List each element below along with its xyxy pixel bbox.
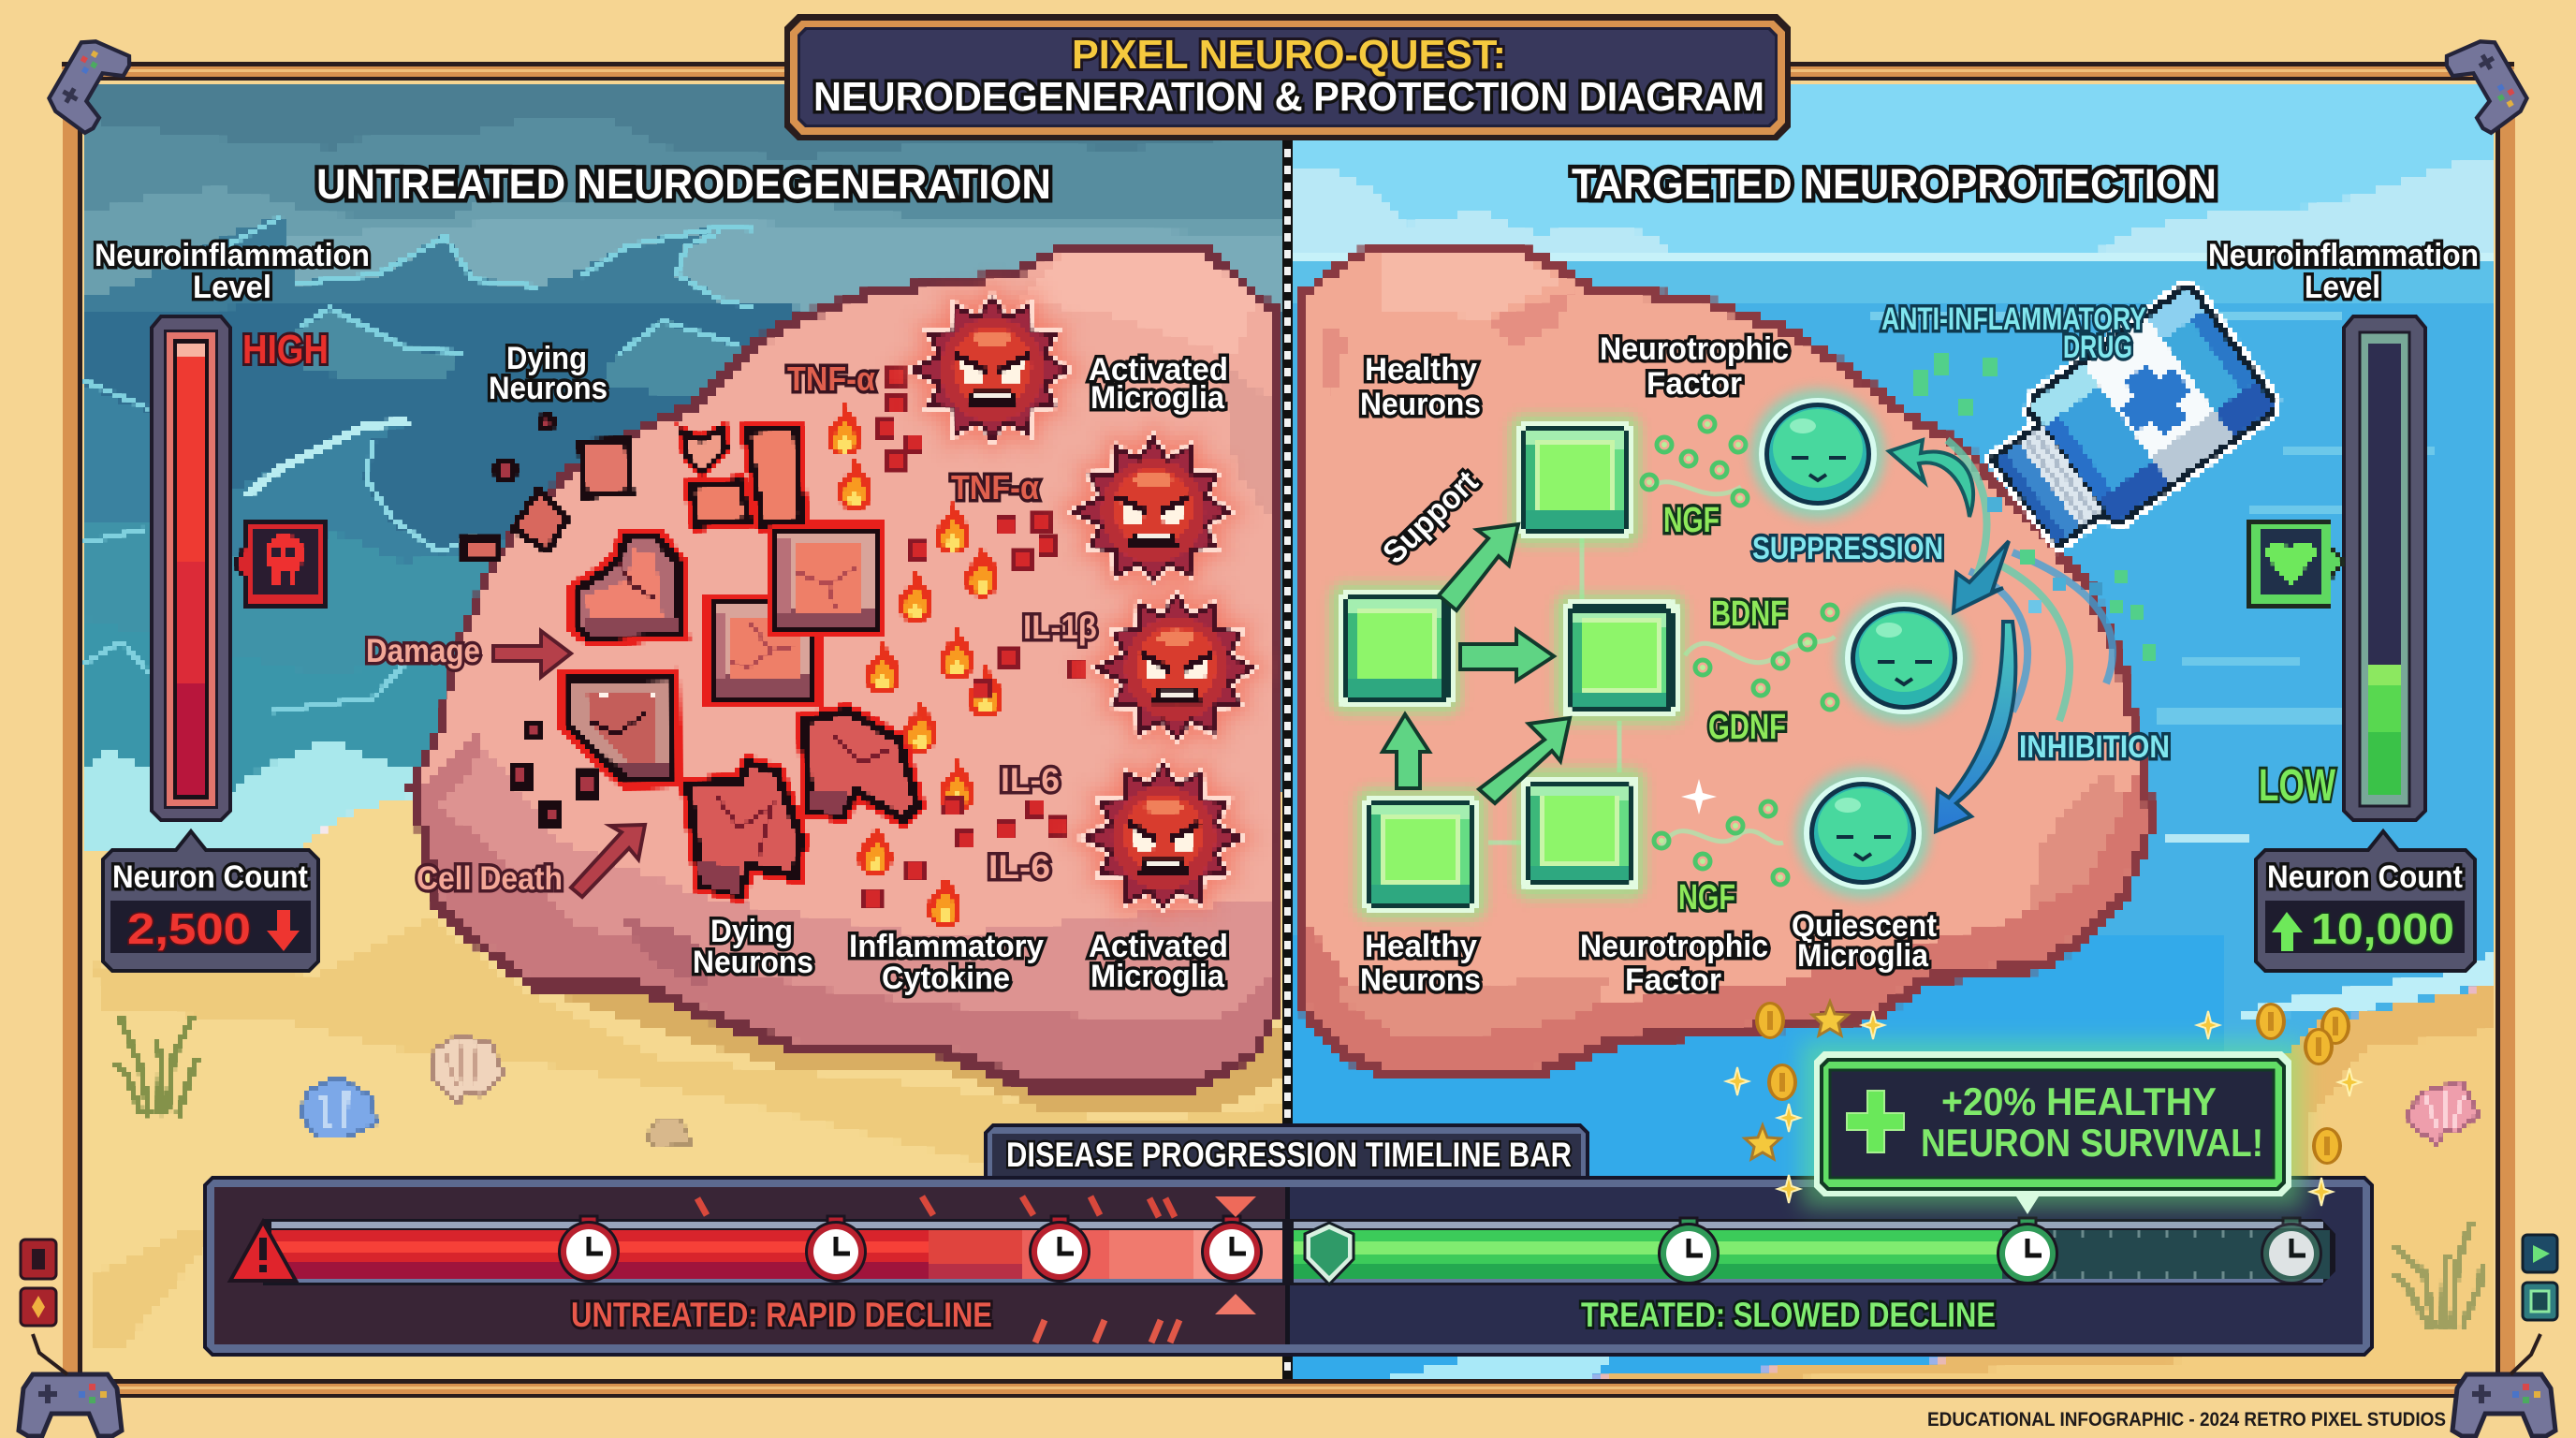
flames bbox=[827, 404, 1003, 927]
labels: protected brain: NGF bbox=[1678, 878, 1735, 917]
heading: targeted: TARGETED NEUROPROTECTION bbox=[1572, 160, 2217, 208]
footer credit: EDUCATIONAL INFOGRAPHIC - 2024 RETRO PIXEL STUDIOS bbox=[1927, 1409, 2446, 1431]
labels: untreated brain: Inflammatory bbox=[849, 929, 1044, 964]
labels: untreated brain: IL-6 bbox=[1001, 762, 1060, 799]
labels: protected brain: Microglia bbox=[1797, 938, 1929, 974]
cross on label bbox=[2124, 363, 2188, 436]
neuroinflammation label: Level bbox=[193, 270, 271, 305]
warning triangle bbox=[230, 1222, 296, 1281]
untreated label: UNTREATED: RAPID DECLINE bbox=[571, 1296, 992, 1334]
high label: HIGH bbox=[242, 327, 329, 373]
swirl of drug effect bbox=[1947, 440, 2113, 721]
divider: dashed centre line bbox=[1282, 140, 1293, 1379]
labels: protected brain bbox=[1360, 301, 2170, 998]
activated microglia 2 bbox=[1074, 439, 1229, 580]
controller: bottom right bbox=[2452, 1374, 2555, 1436]
shell: cream bbox=[432, 1035, 504, 1103]
labels: protected brain: Neurons bbox=[1360, 387, 1481, 422]
arrow: cell death bbox=[571, 825, 645, 897]
arrow: damage bbox=[493, 631, 571, 677]
drug bottle bbox=[1976, 283, 2280, 563]
brain: left hemisphere bbox=[408, 242, 1281, 1093]
labels: protected brain: Support bbox=[1376, 464, 1485, 571]
neuron 2 bbox=[704, 596, 822, 707]
controller: top left bbox=[43, 32, 133, 135]
neuroinflammation label: Level bbox=[2305, 270, 2380, 305]
labels: untreated brain: Dying bbox=[710, 914, 793, 949]
heading: untreated: UNTREATED NEURODEGENERATION bbox=[316, 160, 1051, 208]
background: stormy sea and beach bbox=[82, 81, 1288, 1379]
neuroinflammation label bbox=[95, 238, 370, 305]
quiescent microglia 3 bbox=[1795, 768, 1930, 899]
labels: protected brain: Neurotrophic bbox=[1600, 331, 1789, 367]
neuron count: protected bbox=[2256, 831, 2475, 971]
labels: protected brain: BDNF bbox=[1711, 594, 1787, 634]
arrow: inhibition bbox=[1936, 622, 2015, 831]
labels: untreated brain: Cytokine bbox=[882, 961, 1010, 996]
labels: protected brain: GDNF bbox=[1708, 708, 1786, 747]
neuron count: protected: 10,000 bbox=[2311, 904, 2454, 953]
labels: protected brain: Quiescent bbox=[1792, 908, 1937, 944]
shell: blue bbox=[300, 1077, 376, 1137]
quiescent microglia 2 bbox=[1837, 593, 1971, 724]
labels: protected brain: INHIBITION bbox=[2019, 729, 2170, 765]
title line 2: NEURODEGENERATION & PROTECTION DIAGRAM bbox=[813, 74, 1764, 120]
neuroinflammation label bbox=[2208, 238, 2479, 305]
shell: pink bbox=[2406, 1081, 2479, 1144]
brain: right hemisphere bbox=[1296, 242, 2155, 1081]
labels: untreated brain: Microglia bbox=[1090, 380, 1225, 416]
arrows between healthy neurons bbox=[1383, 524, 1570, 803]
labels: untreated brain: Microglia bbox=[1090, 959, 1225, 994]
clocks: untreated bbox=[558, 1216, 1263, 1283]
neuron count: untreated: 2,500 bbox=[127, 904, 251, 953]
neurotrophic signal lines bbox=[1488, 482, 1835, 847]
labels: protected brain: SUPPRESSION bbox=[1752, 531, 1943, 566]
controller: bottom left bbox=[19, 1374, 122, 1436]
small icons: right side buttons bbox=[2523, 1235, 2557, 1320]
neurotrophic particles bbox=[1642, 417, 1837, 885]
labels: protected brain: DRUG bbox=[2063, 330, 2132, 365]
labels: untreated brain: IL-6 bbox=[988, 849, 1050, 886]
red tick marks bbox=[697, 1196, 1179, 1343]
inflammation gauge: high bbox=[152, 316, 230, 820]
timeline tab bbox=[986, 1125, 1588, 1181]
labels: untreated brain: Activated bbox=[1089, 929, 1228, 964]
labels: protected brain: Factor bbox=[1647, 366, 1742, 402]
inflammation gauge: low bbox=[2344, 316, 2425, 820]
activated microglia 1 bbox=[913, 298, 1068, 439]
title line 1: PIXEL NEURO-QUEST: bbox=[1072, 32, 1506, 78]
labels: protected brain: Factor bbox=[1625, 962, 1721, 998]
neuron 1 bbox=[578, 536, 681, 637]
labels: untreated brain: Activated bbox=[1089, 352, 1228, 388]
timeline tab: DISEASE PROGRESSION TIMELINE BAR bbox=[1006, 1136, 1572, 1174]
red hourglass marks bbox=[1215, 1196, 1256, 1314]
labels: untreated brain: Dying bbox=[506, 341, 587, 376]
labels: protected brain: ANTI-INFLAMMATORY bbox=[1881, 301, 2146, 337]
labels: protected brain: Healthy bbox=[1365, 352, 1477, 388]
activated microglia 4 bbox=[1084, 766, 1239, 907]
neuron 4 bbox=[568, 677, 672, 780]
arrow: suppression bbox=[1889, 440, 1973, 517]
neuron 5 bbox=[688, 763, 800, 894]
neuroinflammation label: Neuroinflammation bbox=[2208, 238, 2479, 273]
bottle cap bbox=[1997, 443, 2080, 543]
arrow: drug to microglia bbox=[1954, 541, 2009, 612]
clocks: treated bbox=[1658, 1218, 2058, 1284]
activated microglia group bbox=[913, 298, 1252, 907]
coins and stars bbox=[1726, 1002, 2361, 1206]
pebble bbox=[646, 1120, 691, 1147]
neuron 6 bbox=[805, 712, 917, 819]
background: calm sea and beach bbox=[1288, 81, 2496, 1386]
labels: protected brain: Healthy bbox=[1365, 929, 1477, 964]
controller cables bbox=[33, 1334, 2540, 1374]
beach decoration: grass right bbox=[2394, 1223, 2482, 1328]
callout: survival: +20% HEALTHY bbox=[1941, 1079, 2217, 1123]
labels: untreated brain: Damage bbox=[366, 633, 480, 669]
callout: survival bbox=[1802, 1041, 2303, 1214]
small icons: left side buttons bbox=[21, 1240, 56, 1326]
labels: untreated brain: Neurons bbox=[693, 945, 813, 980]
labels: untreated brain: Cell Death bbox=[417, 860, 563, 897]
bottle label bbox=[2084, 318, 2233, 483]
low label: LOW bbox=[2259, 761, 2336, 811]
callout: survival: NEURON SURVIVAL! bbox=[1921, 1121, 2263, 1165]
skull badge bbox=[234, 521, 325, 606]
beach decoration: grass left bbox=[114, 1016, 197, 1116]
neuroinflammation label: Neuroinflammation bbox=[95, 238, 370, 273]
shield bbox=[1305, 1223, 1354, 1284]
bottle base bbox=[2147, 289, 2275, 437]
clock: future bbox=[2261, 1218, 2322, 1284]
drug particles bbox=[1913, 353, 2156, 661]
timeline body bbox=[205, 1178, 2372, 1355]
neuron fragments top bbox=[464, 416, 801, 824]
labels: protected brain: Neurons bbox=[1360, 962, 1481, 998]
heart badge bbox=[2249, 521, 2343, 606]
labels: untreated brain bbox=[366, 341, 1228, 996]
cytokine particles bbox=[864, 369, 1086, 907]
bottle outline bbox=[1976, 283, 2280, 563]
labels: untreated brain: TNF-α bbox=[787, 360, 875, 398]
bottle neck side bbox=[2029, 365, 2170, 522]
panel: untreated side bbox=[95, 238, 1252, 996]
background: storm wave foam bbox=[82, 216, 754, 712]
labels: protected brain: NGF bbox=[1663, 501, 1720, 540]
panel: protected side bbox=[1330, 238, 2479, 998]
treated label: TREATED: SLOWED DECLINE bbox=[1581, 1296, 1996, 1334]
neuron count: untreated bbox=[103, 831, 318, 971]
neuron 3 bbox=[768, 521, 886, 638]
title banner bbox=[784, 14, 1791, 140]
neuron count: untreated: Neuron Count bbox=[112, 859, 308, 895]
labels: untreated brain: Neurons bbox=[489, 371, 607, 406]
healthy neurons bbox=[1330, 415, 1686, 919]
quiescent microglia 1 bbox=[1750, 389, 1885, 520]
track bbox=[263, 1219, 2335, 1285]
damaged neurons bbox=[464, 369, 1086, 927]
timeline bar bbox=[205, 1125, 2372, 1355]
labels: untreated brain: IL-1β bbox=[1023, 609, 1097, 646]
labels: protected brain: Neurotrophic bbox=[1580, 929, 1768, 964]
neuron count: protected: Neuron Count bbox=[2267, 859, 2463, 895]
controller: top right bbox=[2443, 32, 2533, 135]
labels: untreated brain: TNF-α bbox=[951, 468, 1039, 506]
activated microglia 3 bbox=[1097, 596, 1252, 738]
